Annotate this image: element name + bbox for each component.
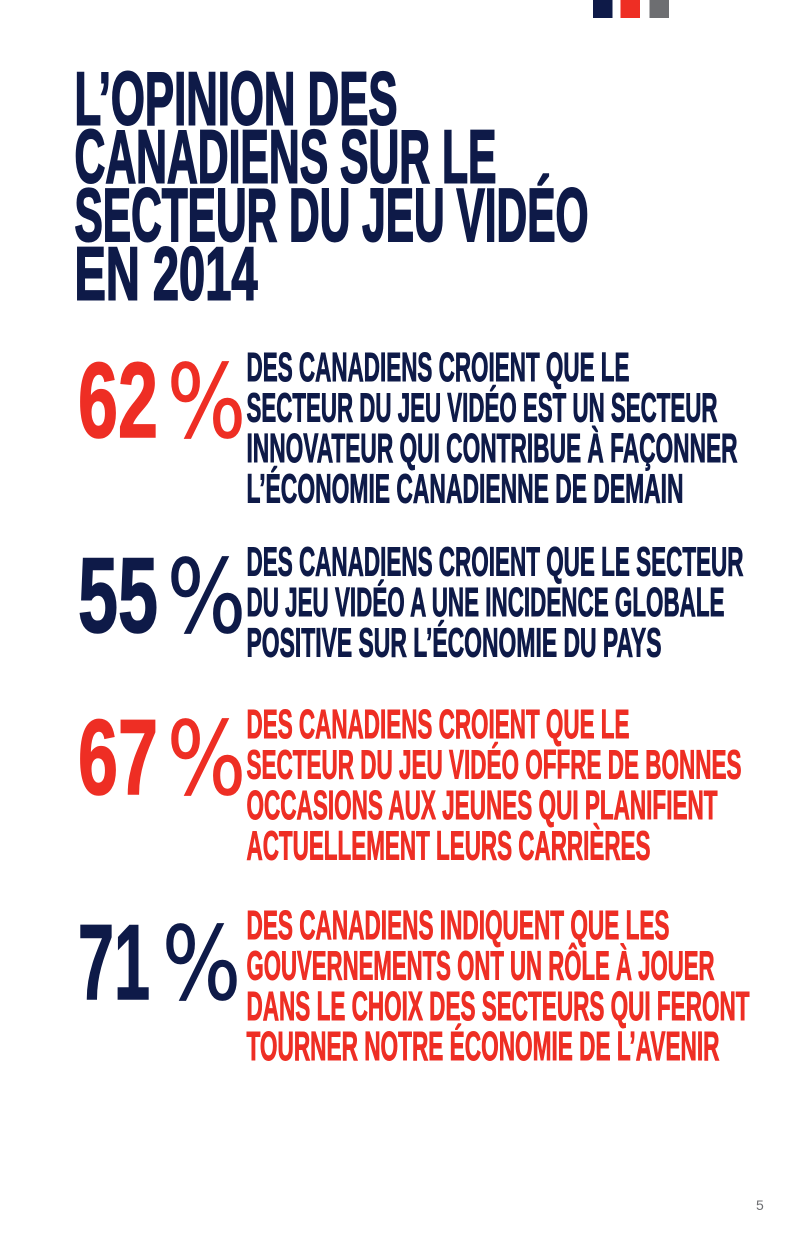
number 71 %: 71 bbox=[78, 902, 150, 1022]
number 67 %: % bbox=[167, 700, 246, 819]
statistic: 71 % bbox=[78, 902, 750, 1069]
statistic: 62 % bbox=[78, 340, 738, 512]
number 62 %: 62 bbox=[78, 340, 158, 460]
title: L’OPINION DES bbox=[74, 56, 398, 140]
number 55 % bbox=[78, 535, 246, 657]
number 67 %: 67 bbox=[78, 697, 158, 817]
number 62 % bbox=[78, 340, 246, 462]
header colour squares bbox=[593, 0, 669, 18]
text block 62 % bbox=[246, 344, 738, 512]
title: EN 2014 bbox=[74, 232, 258, 316]
title: CANADIENS SUR LE bbox=[74, 114, 496, 198]
text block 55 % bbox=[246, 538, 744, 666]
text block 71 % bbox=[246, 902, 750, 1069]
number 62 %: % bbox=[167, 343, 246, 462]
number 67 % bbox=[78, 697, 246, 819]
page number: 5 bbox=[756, 1197, 764, 1213]
text block 67 % bbox=[246, 701, 742, 868]
statistic: 55 % bbox=[78, 535, 744, 666]
number 55 %: 55 bbox=[78, 535, 158, 655]
title bbox=[74, 56, 588, 316]
number 71 %: % bbox=[162, 905, 241, 1024]
statistic: 67 % bbox=[78, 697, 742, 868]
number 55 %: % bbox=[167, 538, 246, 657]
